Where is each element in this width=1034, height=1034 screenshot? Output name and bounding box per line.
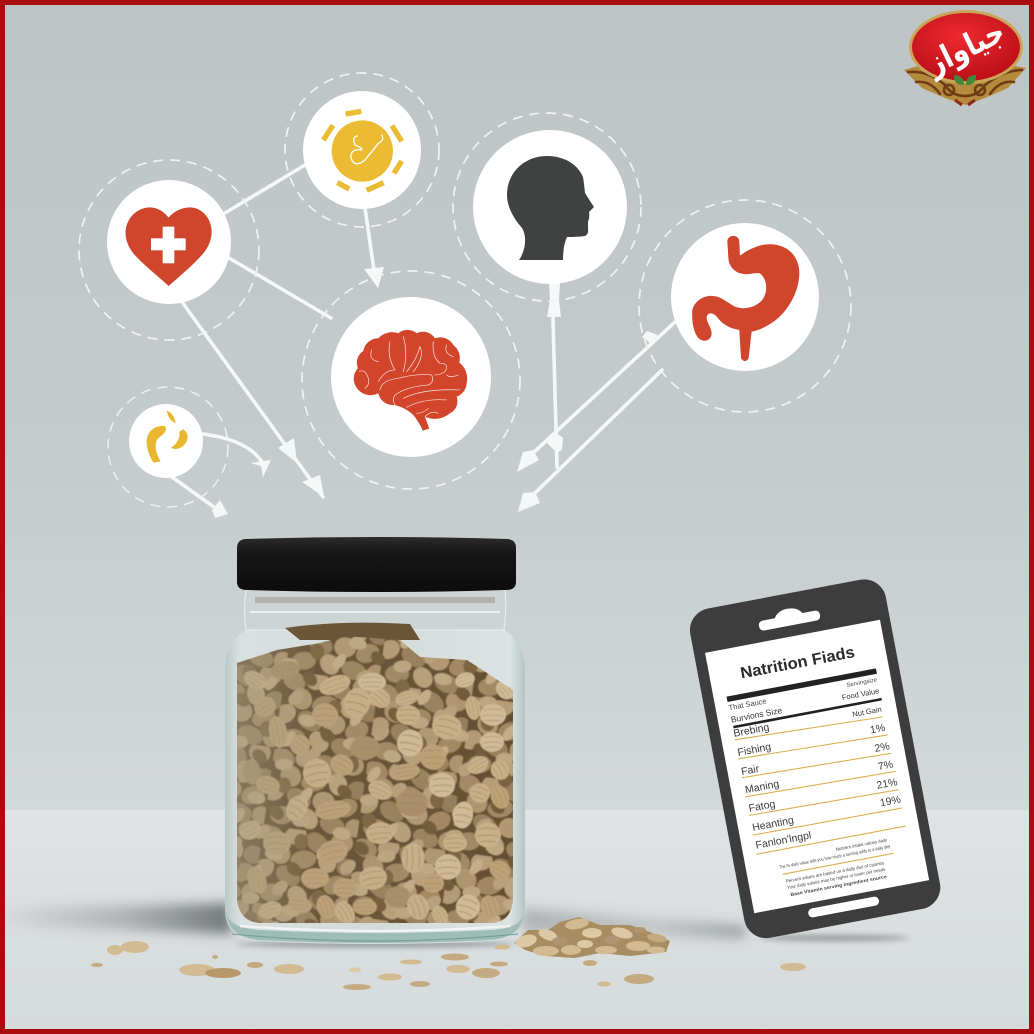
card body — [686, 576, 944, 942]
oat pile — [514, 917, 670, 958]
header text — [728, 675, 884, 741]
nutrition rows: 1% — [869, 722, 886, 736]
nutrition facts card — [686, 576, 944, 942]
fine print: Percent values are based on a daily diet of calories — [785, 860, 885, 884]
oats fill — [237, 636, 513, 923]
gold ornaments — [904, 64, 1026, 105]
nutrition rows — [732, 700, 910, 878]
jar base — [226, 912, 524, 943]
fine print: Base Vitamin serving ingredient source — [790, 874, 888, 897]
header text: Nut Gain — [852, 705, 882, 719]
nutrition rows: Fishing — [737, 741, 772, 759]
node: small yellow bean circle — [108, 387, 228, 507]
header text: That Sauce — [728, 696, 767, 712]
node: head silhouette — [453, 113, 641, 301]
header text: Servingsize — [846, 677, 878, 689]
node: brain — [302, 271, 520, 489]
fine print: The % daily value tells you how much a serving adds to a daily diet — [779, 844, 891, 870]
icon: heart with cross — [126, 207, 212, 286]
glass jar of oats — [225, 537, 525, 944]
nutrition rows: 7% — [877, 758, 894, 773]
nutrition rows: Heanting — [751, 814, 795, 834]
nutrition rows: Brebing — [732, 721, 770, 740]
nutrition rows: Maning — [744, 778, 780, 796]
nutrition rows: 19% — [879, 794, 902, 809]
node: heart health — [79, 160, 259, 340]
icon: stomach — [692, 236, 799, 361]
spilled oat flakes — [91, 917, 806, 990]
brand logo — [904, 10, 1026, 105]
header bars — [727, 668, 882, 729]
icon: brain — [354, 330, 467, 431]
fine print: Nutrient intake values daily — [835, 837, 888, 852]
red oval badge — [909, 10, 1023, 84]
logo wordmark: جیاواز — [919, 12, 1011, 83]
bottom slot — [807, 896, 880, 918]
top slot — [757, 603, 821, 631]
header text: Food Value — [841, 686, 880, 702]
icon: yellow beans — [147, 411, 188, 463]
node: yellow stethoscope badge — [285, 73, 439, 227]
icon: yellow coin with squiggle — [323, 111, 402, 190]
nutrition rows: 2% — [874, 740, 891, 755]
nutrition rows: Fanlon'lngpl — [755, 829, 812, 852]
green leaves — [954, 75, 976, 85]
nutrition rows: 21% — [876, 776, 898, 792]
nutrition rows: Fair — [740, 763, 761, 778]
fine print: Your daily values may be higher or lower per needs — [787, 867, 886, 890]
jar lid — [237, 537, 516, 592]
icon: human head profile — [507, 156, 594, 260]
title: Natrition Fiads — [739, 644, 856, 682]
nutrition rows: Fatog — [748, 798, 776, 815]
jar body — [225, 627, 525, 944]
fine print — [777, 837, 897, 898]
screen — [705, 620, 929, 913]
node: stomach — [639, 200, 851, 412]
header text: Burvions Size — [730, 705, 783, 725]
jar neck — [244, 590, 506, 630]
connector arrows — [172, 165, 675, 518]
